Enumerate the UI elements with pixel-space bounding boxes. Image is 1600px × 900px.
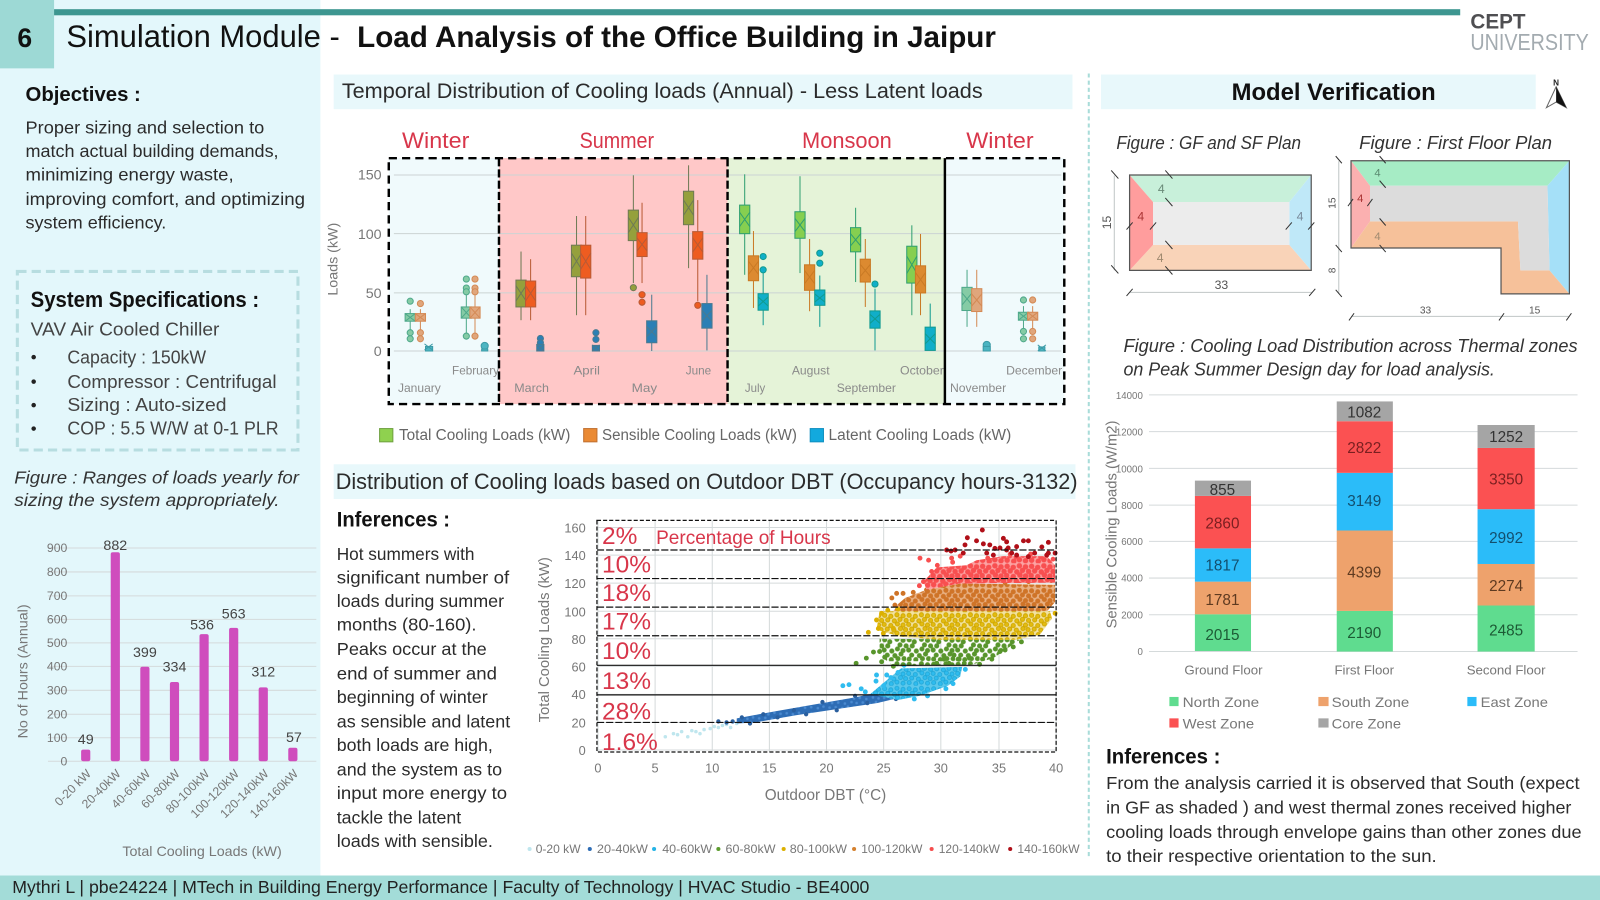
y axis ticks: 8000: [1121, 501, 1143, 512]
bar value labels: 57: [286, 730, 302, 746]
bar: second floor: 3350: [1489, 472, 1523, 489]
legend: thermal zones: East Zone: [1481, 695, 1548, 711]
floor labels: [1184, 662, 1546, 677]
heading: distribution by outdoor DBT: Distribution of Cooling loads based on Outdoor DBT (Occupancy hours-3132): [336, 469, 1078, 494]
boxes: January: [405, 298, 433, 351]
text block: middle inferences: loads during summer: [337, 591, 504, 611]
band boundaries and frame: [597, 520, 1056, 752]
text block: middle inferences: Peaks occur at the: [337, 639, 487, 659]
y axis ticks: 0: [374, 344, 382, 360]
footer: [0, 876, 1600, 900]
legend: scatter categories: [528, 842, 1080, 856]
title: Simulation Module -: [66, 18, 340, 54]
season labels: Summer: [580, 128, 655, 153]
bar: first floor: 4399: [1347, 565, 1381, 582]
category labels: 60-80kW: [138, 766, 183, 811]
month labels: July: [745, 381, 766, 395]
vertical column divider: [1088, 73, 1090, 859]
legend: box plot: Total Cooling Loads (kW): [399, 427, 570, 444]
percentage labels: 28%: [602, 698, 651, 725]
text block: middle inferences: and the system as to: [337, 760, 502, 780]
caption: ranges of loads: [14, 468, 300, 510]
y axis ticks: 10000: [1116, 464, 1143, 475]
text: specifications list: VAV Air Cooled Chiller: [31, 319, 219, 340]
bar chart: hours per load range: 800: [47, 565, 68, 579]
y axis ticks: [564, 521, 586, 758]
season labels: Winter: [402, 128, 470, 153]
text block: right inferences: From the analysis carried it is observed that South (expect: [1106, 773, 1580, 793]
bar: ground floor: 1817: [1205, 557, 1239, 574]
bar: ground floor: 2860: [1205, 516, 1239, 533]
bar: second floor: 2485: [1489, 623, 1523, 640]
legend: scatter categories: 0-20 kW: [536, 842, 581, 856]
percentage labels: 1.6%: [602, 729, 658, 756]
month labels: September: [837, 381, 896, 395]
percentage labels: 10%: [602, 551, 651, 578]
caption: cooling load distribution: Figure : Cooling Load Distribution across Thermal zones: [1123, 335, 1578, 356]
bar: first floor: 2190: [1347, 625, 1381, 642]
dashed season frames: [389, 158, 1064, 404]
logo: CEPT University: CEPT: [1470, 10, 1526, 34]
header accent bar: [54, 9, 1460, 15]
y axis ticks: 6000: [1121, 537, 1143, 548]
axis title: total cooling loads: Total Cooling Loads (kW): [122, 844, 282, 860]
y axis ticks: 80: [572, 632, 586, 647]
diagram: GF and SF plan: 15: [1100, 215, 1114, 229]
diagram: first floor plan: 33: [1420, 305, 1432, 316]
text block: middle inferences: Hot summers with: [337, 544, 474, 564]
percentage labels: [602, 523, 831, 756]
heading: temporal distribution: [334, 74, 1072, 109]
text block: middle inferences: beginning of winter: [337, 687, 488, 707]
percentage labels: 13%: [602, 668, 651, 695]
y axis ticks: 14000: [1116, 391, 1143, 402]
slide number badge: [0, 0, 54, 68]
axis title: total cooling loads: Total Cooling Loads (kW): [537, 557, 553, 722]
axis title: hours: No of Hours (Annual): [16, 604, 32, 738]
text block: middle inferences: both loads are high,: [337, 735, 493, 755]
y axis ticks: 20: [572, 716, 586, 731]
text: objectives body: Proper sizing and selection to: [26, 118, 264, 138]
diagram: GF and SF plan: 4: [1158, 182, 1165, 196]
bar: second floor: 1252: [1489, 429, 1523, 446]
season shading: [389, 158, 1064, 404]
boxes: February: [461, 276, 488, 351]
bar: first floor: 3149: [1347, 493, 1381, 510]
legend: box plot: Latent Cooling Loads (kW): [829, 427, 1011, 444]
season labels: [402, 128, 1034, 153]
bar chart: hours per load range: 200: [47, 707, 68, 721]
legend: thermal zones: South Zone: [1332, 695, 1409, 711]
slide number badge: 6: [17, 23, 32, 53]
boxes: November: [962, 270, 990, 351]
text: objectives body: match actual building demands,: [26, 141, 279, 161]
diagram: GF and SF plan: 4: [1157, 251, 1164, 265]
text: specifications list: [31, 319, 279, 439]
y axis ticks: 0: [579, 743, 586, 758]
scatter: 40-60 kW points: [843, 665, 965, 700]
captions: plan figures: Figure : GF and SF Plan: [1116, 132, 1301, 153]
bar: ground floor: [1195, 481, 1251, 651]
bar value labels: 399: [133, 645, 157, 661]
legend: scatter categories: 60-80kW: [726, 842, 776, 856]
bar chart: hours per load range: 300: [47, 683, 68, 697]
text: objectives body: minimizing energy waste,: [26, 165, 234, 185]
legend: scatter categories: 140-160kW: [1017, 842, 1080, 856]
caption: cooling load distribution: on Peak Summer Design day for load analysis.: [1123, 359, 1495, 380]
icon: north arrow: N: [1553, 79, 1559, 88]
percentage labels: 2%: [602, 523, 637, 550]
panel: objectives: [26, 84, 305, 233]
category labels: [52, 766, 301, 821]
text: specifications list: Sizing : Auto-sized: [67, 394, 227, 415]
x axis ticks: 10: [705, 760, 719, 775]
legend: thermal zones: West Zone: [1183, 717, 1254, 733]
floor labels: Second Floor: [1467, 662, 1546, 677]
y axis ticks: 150: [358, 168, 382, 184]
legend: thermal zones: Core Zone: [1332, 717, 1401, 733]
month labels: April: [573, 363, 600, 377]
boxes: March: [516, 252, 544, 351]
text block: middle inferences: input more energy to: [337, 783, 507, 803]
scatter: 100-120 kW points: [892, 581, 1055, 612]
bar value labels: 312: [251, 665, 275, 681]
bar chart: hours per load range: 700: [47, 589, 68, 603]
bar chart: hours per load range: 900: [47, 541, 68, 555]
heading: model verification: [1101, 74, 1536, 109]
text block: right inferences: Inferences :: [1106, 744, 1220, 768]
bar: second floor: [1478, 425, 1535, 652]
bar: ground floor: 2015: [1205, 627, 1239, 644]
bars: [81, 552, 297, 761]
text block: middle inferences: tackle the latent: [337, 807, 461, 827]
icon: north arrow: [1546, 79, 1566, 108]
caption: cooling load distribution: [1123, 335, 1578, 380]
text: specifications list: COP : 5.5 W/W at 0-1 PLR: [67, 418, 279, 439]
diagram: GF and SF plan: 4: [1297, 209, 1304, 223]
boxes: April: [571, 216, 599, 351]
y axis ticks: [358, 168, 382, 360]
y axis ticks: 140: [564, 548, 586, 563]
x axis ticks: 30: [934, 760, 948, 775]
title: [66, 18, 996, 54]
category labels: 120-140kW: [217, 766, 272, 821]
x axis ticks: 40: [1049, 760, 1063, 775]
box plot: monthly cooling loads: [326, 158, 1064, 404]
text block: right inferences: in GF as shaded ) and west thermal zones received higher: [1106, 797, 1572, 817]
y axis ticks: 12000: [1116, 428, 1143, 439]
legend: thermal zones: [1169, 695, 1548, 733]
month labels: [398, 363, 1062, 395]
diagram: GF and SF plan: 4: [1137, 209, 1144, 223]
diagram: first floor plan: 15: [1328, 197, 1339, 209]
text: specifications list: Capacity : 150kW: [67, 346, 207, 367]
percentage labels: Percentage of Hours: [656, 527, 831, 549]
captions: plan figures: Figure : First Floor Plan: [1359, 132, 1552, 153]
panel: system specifications: [17, 271, 298, 450]
diagram: first floor plan: 8: [1328, 267, 1339, 273]
legend: scatter categories: 40-60kW: [662, 842, 713, 856]
boxes: December: [1018, 297, 1046, 351]
footer: Mythri L | pbe24224 | MTech in Building Energy Performance | Faculty of Technology | HVAC Studio - BE4000: [12, 877, 869, 897]
text: objectives body: improving comfort, and optimizing: [26, 189, 305, 209]
text block: middle inferences: loads with sensible.: [337, 831, 493, 851]
heading: model verification: Model Verification: [1232, 79, 1436, 106]
y axis ticks: 100: [358, 227, 382, 243]
diagram: first floor plan: 15: [1529, 305, 1541, 316]
diagram: first floor plan: [1328, 156, 1571, 320]
logo: CEPT University: [1470, 10, 1589, 55]
diagram: GF and SF plan: 33: [1215, 278, 1228, 292]
header: [0, 0, 1589, 68]
stacked bar chart: zone loads by floor: [1104, 391, 1578, 677]
month labels: February: [452, 363, 500, 377]
y axis ticks: 0: [1137, 647, 1143, 658]
y axis ticks: 50: [366, 286, 382, 302]
month labels: June: [686, 363, 711, 377]
boxes: September: [851, 208, 880, 350]
scatter: 120-140 kW points: [919, 554, 1055, 590]
text block: right inferences: [1106, 744, 1582, 866]
season labels: Monsoon: [802, 128, 892, 153]
axis title: outdoor DBT: Outdoor DBT (°C): [765, 787, 886, 804]
text block: right inferences: to their respective orientation to the sun.: [1106, 846, 1437, 866]
legend: scatter categories: 100-120kW: [861, 842, 923, 856]
text block: right inferences: cooling loads through envelope gains than other zones due: [1106, 822, 1582, 842]
scatter: 20-40 kW points: [718, 687, 907, 723]
bar chart: hours per load range: [16, 538, 316, 860]
text block: middle inferences: [337, 508, 510, 851]
text: objectives body: [26, 118, 305, 233]
y axis ticks: 4000: [1121, 574, 1143, 585]
boxes: June: [683, 165, 712, 350]
y axis ticks: 120: [564, 576, 586, 591]
bar: ground floor: 1781: [1205, 592, 1239, 609]
y axis ticks: 160: [564, 521, 586, 536]
bar chart: hours per load range: 500: [47, 636, 68, 650]
bar: ground floor: 855: [1210, 482, 1235, 499]
category labels: 80-100kW: [163, 766, 213, 816]
text: specifications list: Compressor : Centrifugal: [67, 371, 277, 392]
legend: scatter categories: 120-140kW: [939, 842, 1000, 856]
boxes: August: [795, 176, 825, 327]
x axis ticks: 15: [762, 760, 776, 775]
bar value labels: 49: [78, 732, 94, 748]
category labels: 0-20 kW: [52, 766, 94, 809]
caption: ranges of loads: sizing the system appropriately.: [14, 490, 280, 510]
bar chart: hours per load range: 600: [47, 612, 68, 626]
scatter chart: cooling load vs outdoor DBT: [537, 520, 1063, 804]
bar value labels: 882: [103, 538, 127, 554]
bar value labels: [78, 538, 302, 748]
diagram: GF and SF plan: [1100, 170, 1315, 296]
x axis ticks: 35: [992, 760, 1006, 775]
category labels: 40-60kW: [109, 766, 153, 811]
text block: middle inferences: months (80-160).: [337, 615, 477, 635]
legend: box plot: Sensible Cooling Loads (kW): [602, 427, 797, 444]
text block: middle inferences: as sensible and latent: [337, 712, 510, 732]
bar: second floor: 2992: [1489, 530, 1523, 547]
category labels: 20-40kW: [79, 766, 124, 811]
month labels: October: [900, 363, 944, 377]
month labels: August: [792, 363, 830, 377]
y axis ticks: 60: [572, 659, 586, 674]
title: Load Analysis of the Office Building in Jaipur: [357, 21, 996, 54]
bar chart: hours per load range: 400: [47, 659, 68, 673]
boxes: October: [907, 225, 935, 350]
y axis ticks: 100: [564, 604, 586, 619]
bar: first floor: 2822: [1347, 440, 1381, 457]
diagram: first floor plan: 4: [1374, 168, 1381, 180]
month labels: May: [632, 381, 658, 395]
month labels: January: [398, 381, 442, 395]
y axis ticks: 2000: [1121, 610, 1143, 621]
month labels: November: [950, 381, 1006, 395]
heading: temporal distribution: Temporal Distribution of Cooling loads (Annual) - Less Latent loads: [342, 79, 983, 103]
x axis ticks: [594, 760, 1063, 775]
y axis title: Sensible Cooling Loads (W/m2): [1104, 421, 1120, 628]
diagram: first floor plan: 4: [1374, 231, 1381, 243]
bar chart: hours per load range: 0: [61, 754, 68, 768]
scatter: 0-20 kW points: [665, 723, 737, 737]
bar value labels: 334: [163, 659, 186, 675]
y axis ticks: [1116, 391, 1143, 658]
bar value labels: 536: [190, 618, 214, 634]
scatter: 60-80 kW points: [856, 639, 1021, 666]
floor labels: Ground Floor: [1184, 662, 1263, 677]
caption: ranges of loads: Figure : Ranges of loads yearly for: [14, 468, 300, 488]
percentage labels: 17%: [602, 609, 651, 636]
legend: box plot: [380, 427, 1011, 444]
category labels: 100-120kW: [188, 766, 242, 821]
legend: scatter categories: 80-100kW: [790, 842, 847, 856]
scatter: 140-160 kW points: [947, 530, 1055, 557]
month labels: March: [514, 381, 549, 395]
text block: middle inferences: Inferences :: [337, 508, 450, 532]
bar: second floor: 2274: [1489, 578, 1524, 595]
bar: first floor: 1082: [1347, 404, 1381, 421]
month labels: December: [1006, 363, 1062, 377]
bar chart: hours per load range: 100: [47, 731, 68, 745]
y axis ticks: 40: [572, 687, 586, 702]
category labels: 140-160kW: [247, 766, 301, 821]
legend: scatter categories: 20-40kW: [597, 842, 648, 856]
bar: first floor: [1337, 401, 1393, 652]
x axis ticks: 25: [877, 760, 891, 775]
legend: thermal zones: North Zone: [1183, 695, 1259, 711]
heading: objectives: Objectives :: [26, 84, 141, 106]
bar value labels: 563: [222, 606, 246, 622]
panel: left sidebar background: [0, 0, 320, 876]
heading: system specifications: System Specifications :: [31, 287, 259, 312]
percentage labels: 18%: [602, 580, 651, 607]
x axis ticks: 5: [652, 760, 659, 775]
y axis title: Loads (kW): [326, 223, 342, 296]
boxes: May: [628, 175, 657, 351]
captions: plan figures: [1116, 132, 1552, 153]
x axis ticks: 20: [819, 760, 834, 775]
floor labels: First Floor: [1334, 662, 1395, 677]
text: objectives body: system efficiency.: [26, 213, 166, 233]
boxes: July: [740, 174, 768, 325]
x axis ticks: 0: [594, 760, 602, 775]
scatter: 80-100 kW points: [868, 609, 1055, 640]
text block: middle inferences: significant number of: [337, 568, 509, 588]
diagram: first floor plan: 4: [1357, 193, 1363, 205]
text block: middle inferences: end of summer and: [337, 664, 497, 684]
percentage labels: 10%: [602, 638, 651, 665]
season labels: Winter: [966, 128, 1034, 153]
